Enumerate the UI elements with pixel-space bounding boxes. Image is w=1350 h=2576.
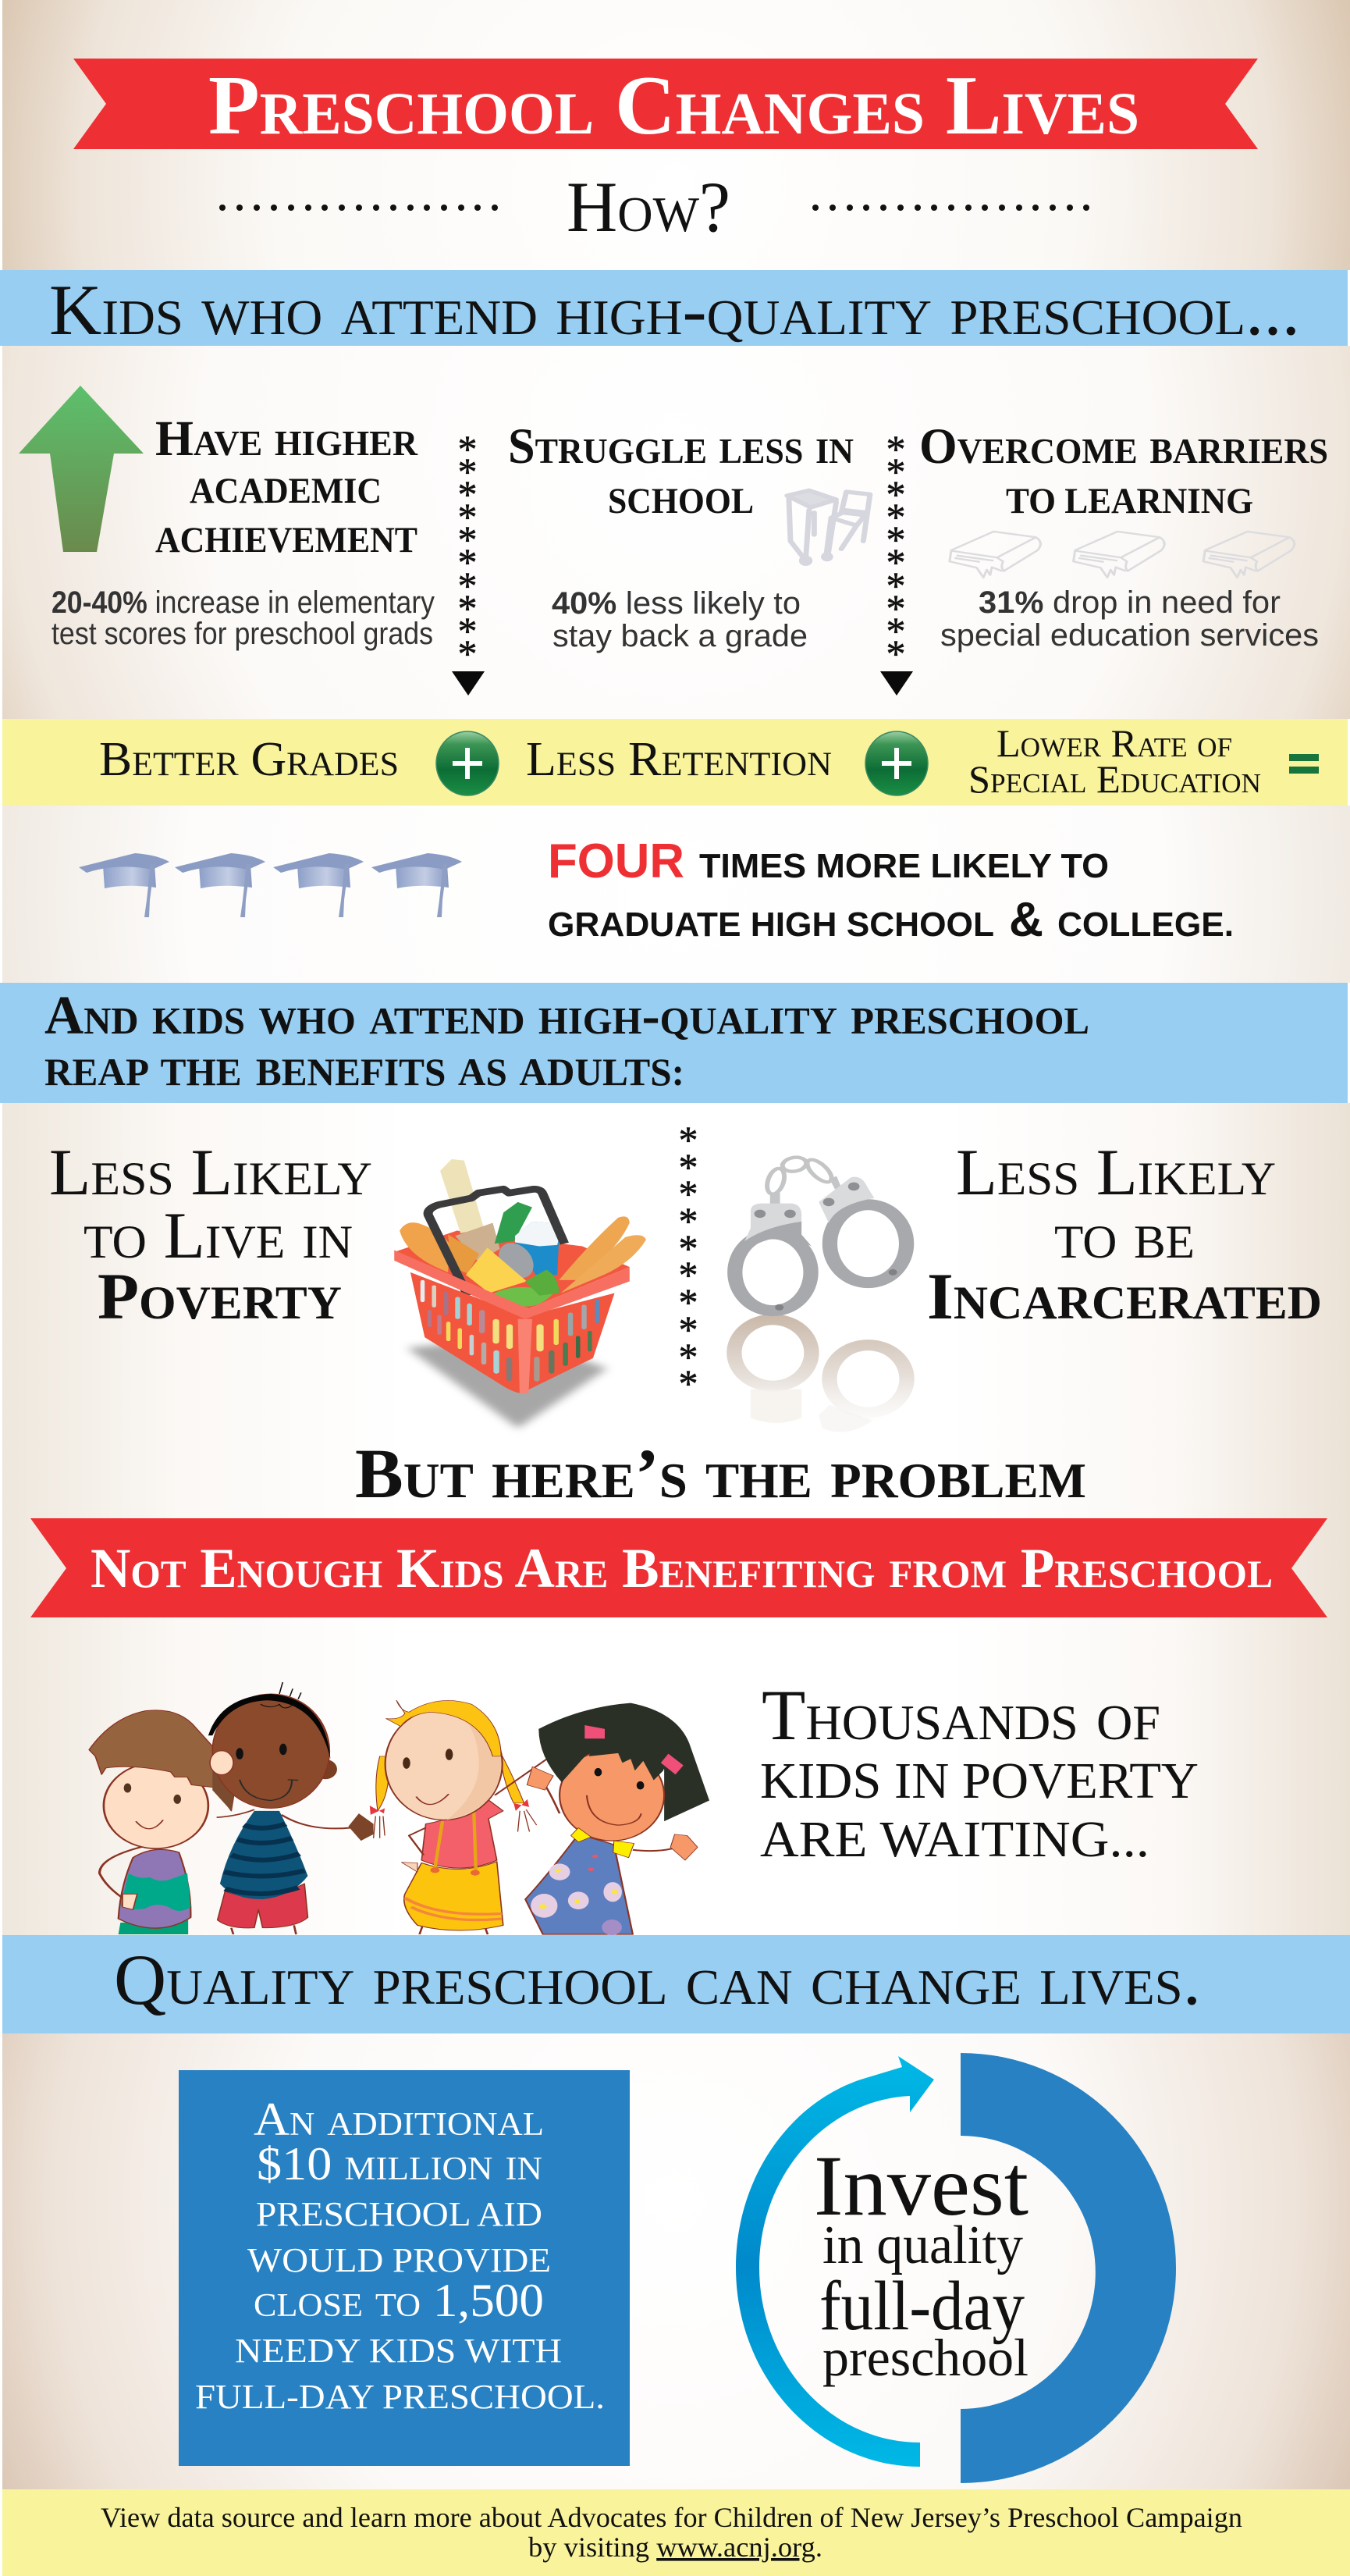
- yellow equation band: Better Grades: [99, 733, 399, 786]
- text: four times more likely: GRADUATE HIGH SCHOOL: [548, 906, 994, 944]
- divider: asterisks and arrow 2: *: [886, 586, 905, 630]
- panel: less likely to live in poverty: [49, 1136, 372, 1333]
- panel: additional aid callout: $10 million in: [257, 2138, 542, 2190]
- icon: grocery basket: [394, 1159, 646, 1429]
- stat text: test scores: test scores for preschool grads: [52, 617, 433, 651]
- stat text: retention: [552, 586, 808, 653]
- child 1: [89, 1710, 237, 1934]
- heading: struggle less in school: Struggle less in: [508, 418, 854, 475]
- divider: asterisks and arrow 1: *: [457, 609, 478, 653]
- text: thousands of kids waiting: [760, 1675, 1199, 1868]
- stat text: retention: 40% less likely to: [552, 586, 801, 621]
- footer: [2, 2489, 1350, 2576]
- stat text: special education: special education services: [940, 618, 1319, 653]
- invest text: full-day: [819, 2268, 1025, 2345]
- heading: overcome barriers to learning: Overcome barriers: [919, 418, 1328, 475]
- divider: asterisks and arrow 2: *: [886, 427, 905, 471]
- blue band: adults: REAP THE BENEFITS AS ADULTS:: [44, 1050, 684, 1094]
- divider: asterisks and arrow 2: [880, 427, 913, 696]
- icon: plus 2: [865, 731, 928, 795]
- panel: less likely to be incarcerated: to be: [1054, 1199, 1195, 1272]
- text: thousands of kids waiting: ARE WAITING...: [760, 1811, 1149, 1868]
- divider: asterisks and arrow 2: *: [886, 564, 905, 607]
- invest text: preschool: [822, 2328, 1028, 2387]
- divider: asterisks and arrow 2: *: [886, 518, 905, 561]
- yellow equation band: Less Retention: [526, 733, 832, 786]
- footer: View data source and learn more about Advocates for Children of New Jersey’s Preschool Campaign: [101, 2502, 1242, 2533]
- blue band: adults: And kids who attend high-quality preschool: [44, 986, 1089, 1046]
- heading: have higher academic achievement: ACHIEVEMENT: [155, 520, 417, 560]
- text: four times more likely: FOUR: [548, 834, 684, 888]
- divider: asterisks center: *: [679, 1253, 698, 1297]
- icon: graduation caps: [79, 853, 462, 917]
- divider: asterisks and arrow 1: *: [457, 586, 478, 630]
- icon: plus 1: [436, 731, 499, 795]
- panel: less likely to live in poverty: Less Likely: [49, 1136, 372, 1209]
- panel: higher academic achievement: [19, 386, 435, 651]
- icon: equals: [1289, 754, 1319, 774]
- divider: asterisks center: *: [679, 1361, 698, 1405]
- chart: invest cycle graphic: [736, 2053, 1176, 2483]
- panel: less likely to be incarcerated: [927, 1136, 1322, 1333]
- heading: have higher academic achievement: ACADEMIC: [190, 471, 382, 511]
- stat text: special education: 31% drop in need for: [979, 585, 1281, 620]
- footer: by visiting www.acnj.org.: [528, 2532, 822, 2563]
- text: four times more likely: COLLEGE.: [1057, 906, 1234, 944]
- divider: asterisks center: *: [679, 1308, 698, 1351]
- panel: additional aid callout: An additional: [254, 2094, 544, 2145]
- heading: but here's the problem: But here’s the problem: [355, 1436, 1086, 1513]
- divider: asterisks center: *: [679, 1335, 698, 1379]
- panel: additional aid callout: WOULD PROVIDE: [247, 2241, 551, 2279]
- divider: asterisks and arrow 2: *: [886, 632, 905, 675]
- yellow equation band: Special Education: [968, 757, 1261, 801]
- text: four times more likely: [548, 834, 1234, 947]
- yellow equation band: Lower Rate of: [997, 721, 1232, 765]
- panel: less likely to be incarcerated: Less Likely: [956, 1136, 1276, 1209]
- divider: asterisks and arrow 1: *: [457, 564, 478, 607]
- blue band: quality preschool: Quality preschool can change lives.: [114, 1940, 1201, 2019]
- divider: asterisks center: *: [679, 1280, 698, 1324]
- heading: overcome barriers to learning: [919, 418, 1328, 521]
- child 2: [208, 1682, 374, 1934]
- stat text: test scores: [52, 585, 435, 651]
- divider: asterisks center: *: [679, 1199, 698, 1243]
- panel: struggle less in school: [508, 418, 870, 653]
- title banner: Preschool Changes Lives: [208, 59, 1139, 152]
- divider: asterisks and arrow 1: [452, 427, 485, 696]
- how? heading: How?: [567, 167, 730, 247]
- divider: asterisks and arrow 1: *: [457, 518, 478, 561]
- icon: handcuffs: [733, 1155, 907, 1432]
- divider: asterisks center: *: [679, 1172, 698, 1215]
- panel: less likely to live in poverty: to Live in: [83, 1199, 353, 1272]
- text: four times more likely: &: [1009, 893, 1043, 947]
- heading: have higher academic achievement: Have higher: [155, 411, 418, 467]
- child 4: [525, 1703, 709, 1935]
- divider: asterisks and arrow 1: *: [457, 427, 478, 471]
- panel: less likely to be incarcerated: Incarcerated: [927, 1260, 1322, 1333]
- divider: asterisks and arrow 2: *: [886, 540, 905, 584]
- heading: overcome barriers to learning: TO LEARNING: [1006, 481, 1253, 521]
- illustration: four children: [89, 1682, 709, 1935]
- text: thousands of kids waiting: KIDS IN POVERTY: [760, 1752, 1199, 1809]
- icon: green up arrow: [19, 386, 144, 552]
- divider: asterisks and arrow 1: *: [457, 472, 478, 516]
- invest text: [814, 2138, 1028, 2387]
- panel: additional aid callout: close to 1,500: [254, 2275, 544, 2326]
- divider: asterisks and arrow 2: *: [886, 450, 905, 493]
- panel: less likely to live in poverty: Poverty: [98, 1260, 342, 1333]
- divider: asterisks and arrow 2: *: [886, 495, 905, 539]
- divider: asterisks and arrow 1: *: [457, 632, 478, 675]
- divider: asterisks center: *: [679, 1118, 698, 1162]
- panel: additional aid callout: PRESCHOOL AID: [256, 2195, 542, 2233]
- divider: asterisks center: *: [679, 1145, 698, 1189]
- divider: asterisks and arrow 2: *: [886, 609, 905, 653]
- heading: have higher academic achievement: [155, 411, 418, 560]
- divider: asterisks and arrow 1: *: [457, 540, 478, 584]
- text: four times more likely: TIMES MORE LIKELY TO: [699, 847, 1109, 885]
- panel: graduation: [79, 834, 1234, 947]
- stat text: special education: [940, 585, 1319, 653]
- blue band: kids who attend: Kids who attend high-quality preschool...: [49, 270, 1300, 350]
- panel: additional aid callout: NEEDY KIDS WITH: [235, 2332, 562, 2370]
- heading: struggle less in school: SCHOOL: [608, 481, 754, 521]
- stat text: retention: stay back a grade: [552, 619, 808, 653]
- child 3: [370, 1700, 547, 1934]
- blue half ring: [961, 2053, 1176, 2483]
- cyan curved arrow: [736, 2056, 934, 2467]
- icon: three books: [950, 532, 1295, 578]
- panel: overcome barriers: [919, 418, 1328, 653]
- divider: asterisks and arrow 1: *: [457, 450, 478, 493]
- problem banner: [30, 1518, 1327, 1617]
- invest text: Invest: [814, 2138, 1028, 2233]
- panel: additional aid callout: FULL-DAY PRESCHOOL.: [195, 2378, 605, 2416]
- divider: asterisks and arrow 2: *: [886, 472, 905, 516]
- blue band: quality preschool: [2, 1935, 1350, 2033]
- yellow equation band: [2, 719, 1348, 806]
- heading: struggle less in school: [508, 418, 854, 521]
- panel: additional aid callout: [179, 2070, 630, 2466]
- problem banner: Not Enough Kids Are Benefiting from Preschool: [91, 1537, 1273, 1599]
- text: thousands of kids waiting: Thousands of: [762, 1675, 1160, 1755]
- divider: asterisks and arrow 1: *: [457, 495, 478, 539]
- invest text: in quality: [822, 2215, 1023, 2275]
- divider: asterisks center: [679, 1118, 698, 1405]
- how? heading: [219, 167, 1089, 247]
- stat text: test scores: 20-40% increase in elementary: [52, 585, 435, 620]
- icon: school desk: [787, 490, 870, 564]
- blue band: adults: [0, 983, 1348, 1103]
- divider: asterisks center: *: [679, 1226, 698, 1270]
